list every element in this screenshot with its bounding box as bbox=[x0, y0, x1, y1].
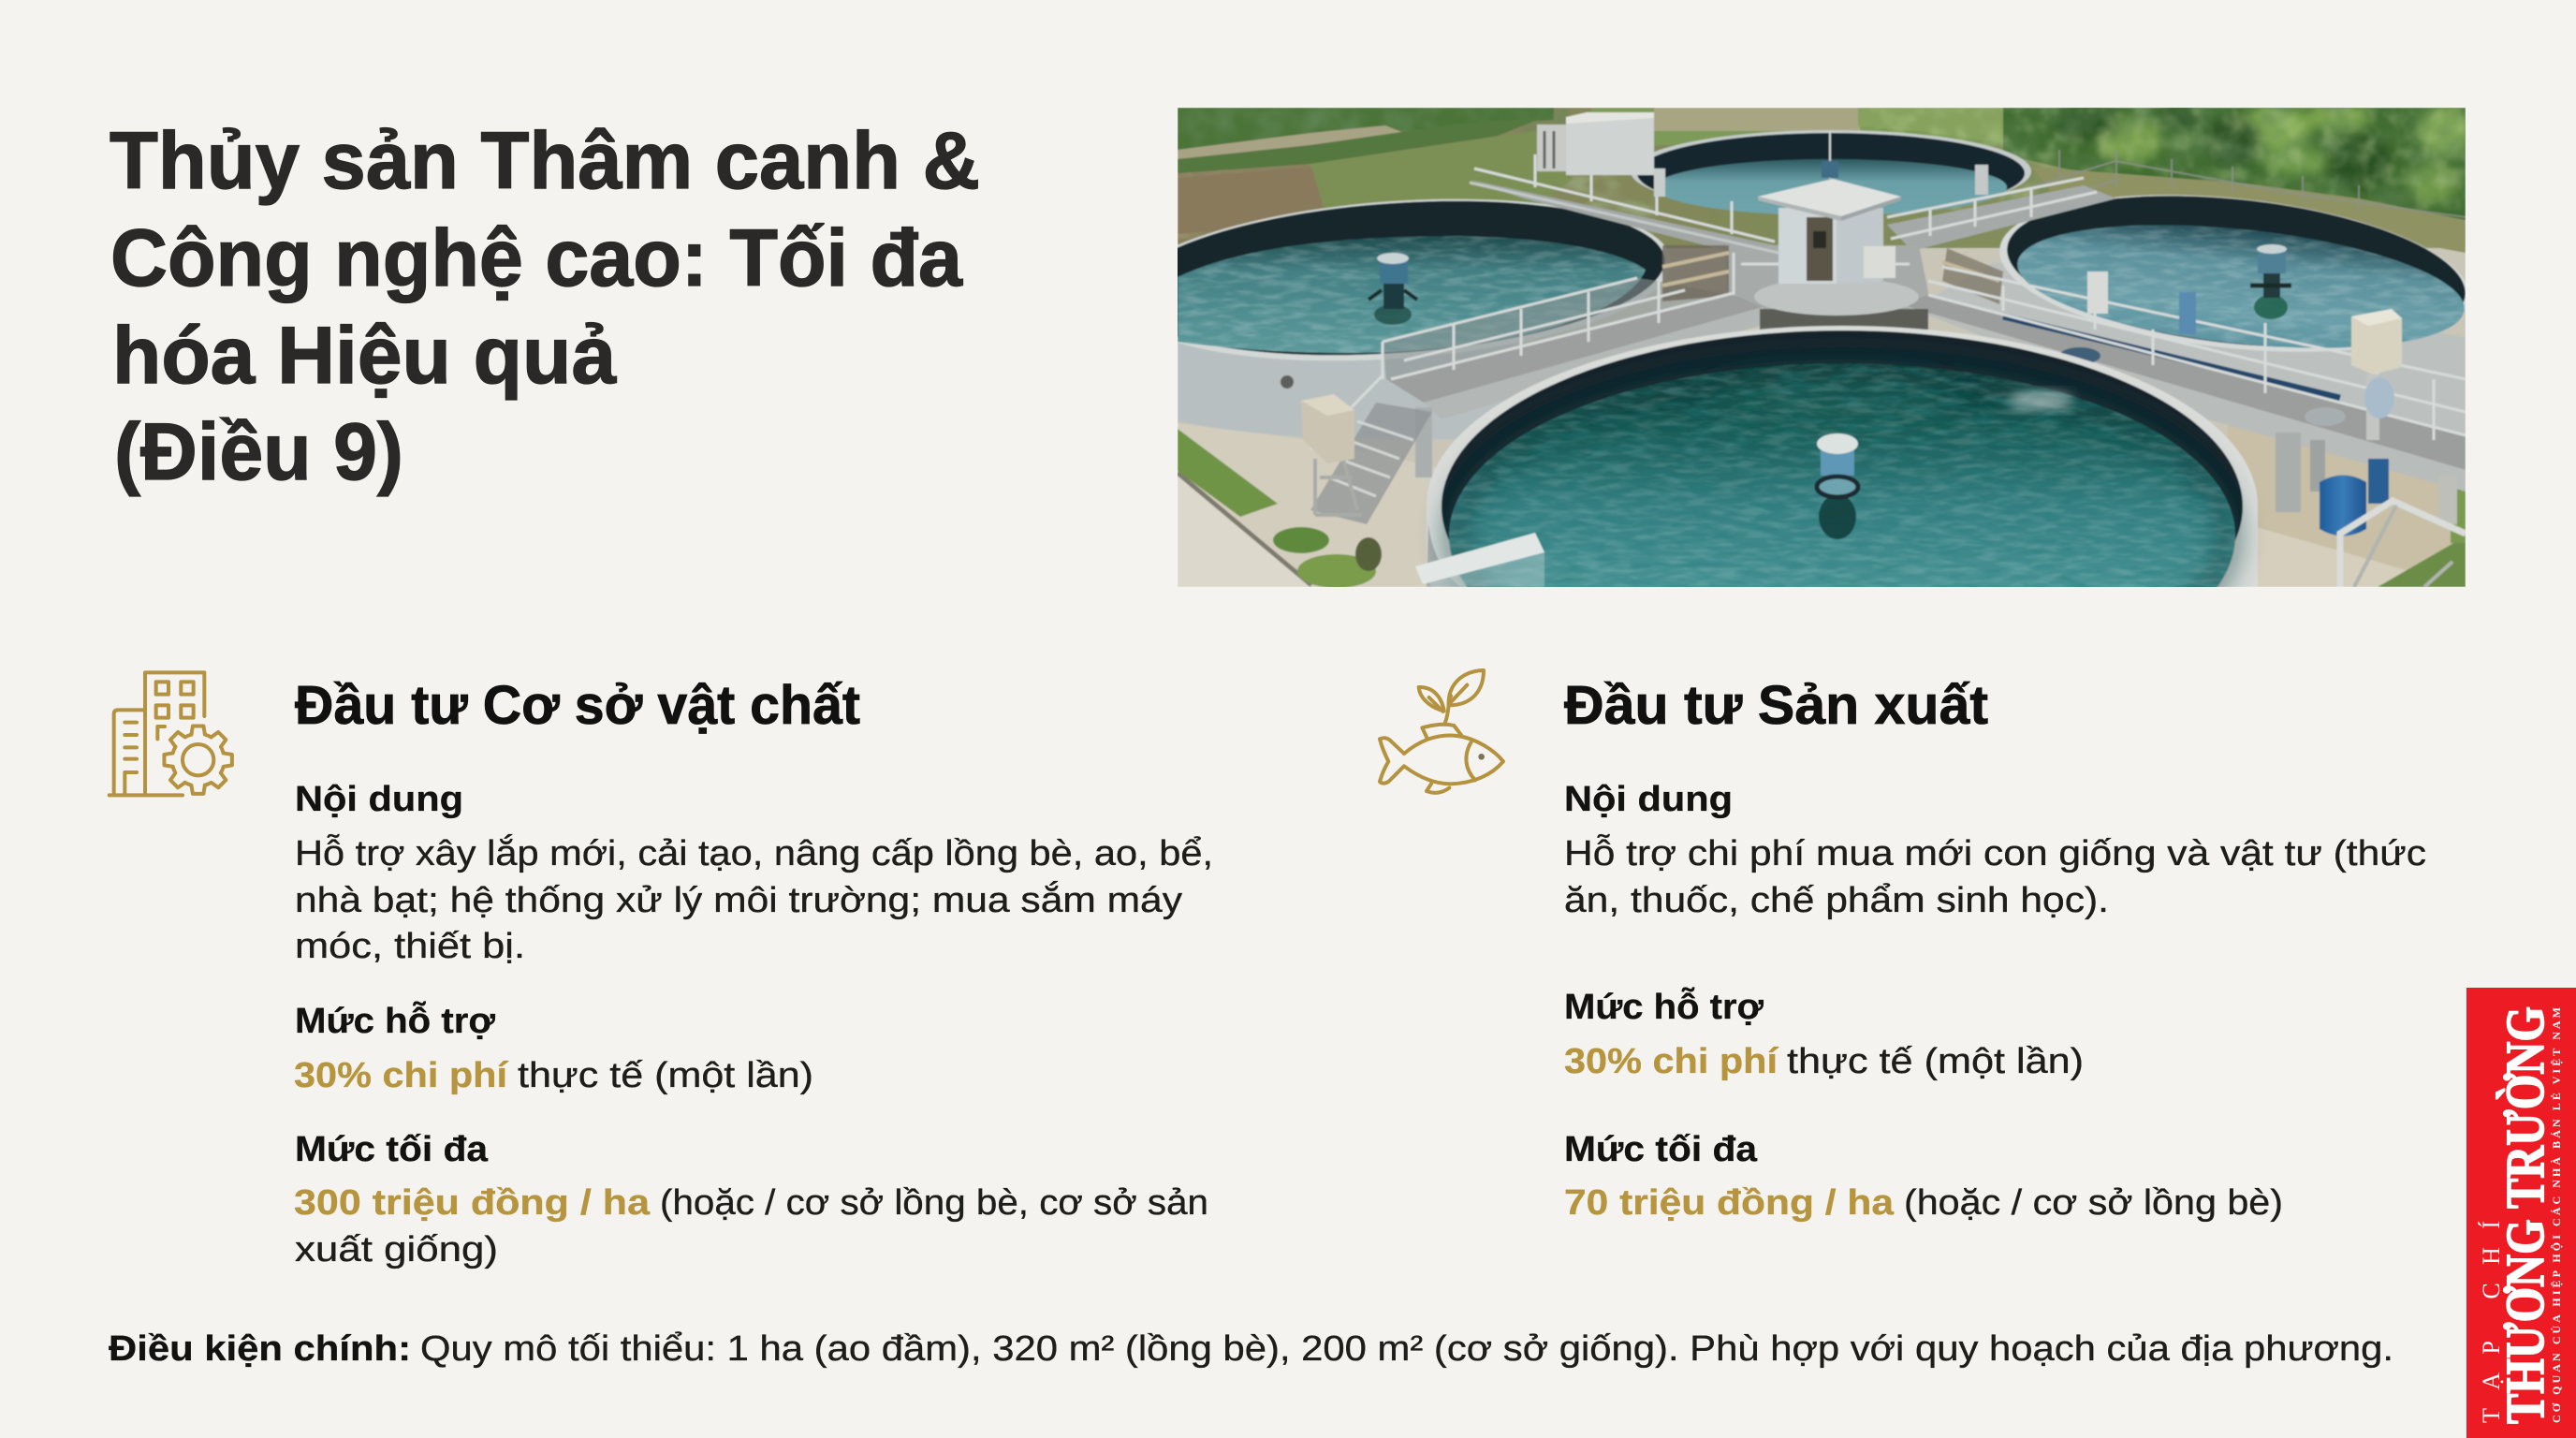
support level block: thực tế (một lần) bbox=[1787, 1042, 2084, 1081]
pipe, barrel and front railing bbox=[1415, 459, 2466, 587]
logo: magazine banner: TẠP CHÍ bbox=[2478, 1221, 2505, 1423]
footer: main conditions: Điều kiện chính: bbox=[109, 1329, 411, 1369]
title: Thủy sản Thâm canh & bbox=[110, 116, 980, 206]
support level block: 30% chi phí bbox=[1564, 1042, 1779, 1081]
central control kiosk bbox=[1754, 131, 1919, 315]
back tank bbox=[1631, 130, 2031, 215]
support level block: Mức hỗ trợ bbox=[295, 1000, 496, 1041]
support level block: Mức hỗ trợ bbox=[1564, 986, 1764, 1027]
maximum level block: (hoặc / cơ sở lồng bè) bbox=[1904, 1183, 2283, 1223]
walkways bbox=[1383, 180, 2466, 524]
support level block: thực tế (một lần) bbox=[518, 1056, 813, 1095]
maximum level block: 300 triệu đồng / ha bbox=[294, 1183, 651, 1223]
railings bbox=[1310, 154, 2466, 449]
content block: nhà bạt; hệ thống xử lý môi trường; mua sắm máy bbox=[295, 880, 1182, 920]
icon: building with gear bbox=[110, 672, 232, 795]
maximum level block: Mức tối đa bbox=[1564, 1130, 1758, 1169]
support level block bbox=[294, 1000, 813, 1095]
left tank bbox=[1178, 198, 1666, 440]
maximum level block: Mức tối đa bbox=[295, 1130, 489, 1169]
field and vegetation background bbox=[1178, 104, 2471, 253]
photo: circular aquaculture tanks bbox=[1178, 108, 2466, 587]
ground pavement and greenery bbox=[1178, 421, 2466, 588]
title: (Điều 9) bbox=[114, 407, 403, 497]
icon: fish with sprout bbox=[1380, 670, 1503, 793]
title: Công nghệ cao: Tối đa bbox=[110, 213, 963, 303]
content block bbox=[1564, 780, 2426, 920]
content block: Hỗ trợ xây lắp mới, cải tạo, nâng cấp lồng bè, ao, bể, bbox=[295, 833, 1213, 873]
maximum level block bbox=[1564, 1130, 2283, 1223]
content block: Hỗ trợ chi phí mua mới con giống và vật tư (thức bbox=[1564, 833, 2426, 873]
heading: production: Đầu tư Sản xuất bbox=[1564, 675, 1988, 736]
content block: ăn, thuốc, chế phẩm sinh học). bbox=[1564, 881, 2109, 920]
logo: magazine banner: CƠ QUAN CỦA HIỆP HỘI CÁC NHÀ BÁN LẺ VIỆT NAM bbox=[2550, 1007, 2563, 1423]
logo: magazine banner bbox=[2466, 988, 2576, 1438]
content block: Nội dung bbox=[1564, 780, 1733, 819]
footer: main conditions: Quy mô tối thiểu: 1 ha (ao đầm), 320 m² (lồng bè), 200 m² (cơ sở giống). Phù hợp với quy hoạch của địa phương. bbox=[420, 1329, 2393, 1369]
equipment cabinets bbox=[1301, 112, 2402, 524]
right tank bbox=[1938, 194, 2466, 433]
content block bbox=[295, 780, 1213, 966]
front tank bbox=[1427, 324, 2258, 587]
panel: production investment bbox=[1564, 675, 2426, 1223]
support level block bbox=[1564, 986, 2084, 1081]
content block: Nội dung bbox=[295, 780, 463, 819]
support level block: 30% chi phí bbox=[294, 1056, 509, 1095]
content block: móc, thiết bị. bbox=[295, 927, 525, 966]
heading: infrastructure: Đầu tư Cơ sở vật chất bbox=[295, 675, 860, 736]
logo: magazine banner: THƯƠNG TRƯỜNG bbox=[2495, 1006, 2555, 1424]
maximum level block: 70 triệu đồng / ha bbox=[1564, 1183, 1895, 1223]
maximum level block bbox=[294, 1130, 1208, 1269]
title: hóa Hiệu quả bbox=[112, 311, 617, 401]
panel: infrastructure investment bbox=[294, 675, 1213, 1269]
maximum level block: xuất giống) bbox=[295, 1230, 498, 1269]
maximum level block: (hoặc / cơ sở lồng bè, cơ sở sản bbox=[660, 1183, 1208, 1223]
aerators bbox=[1368, 161, 2291, 539]
title bbox=[110, 116, 980, 497]
